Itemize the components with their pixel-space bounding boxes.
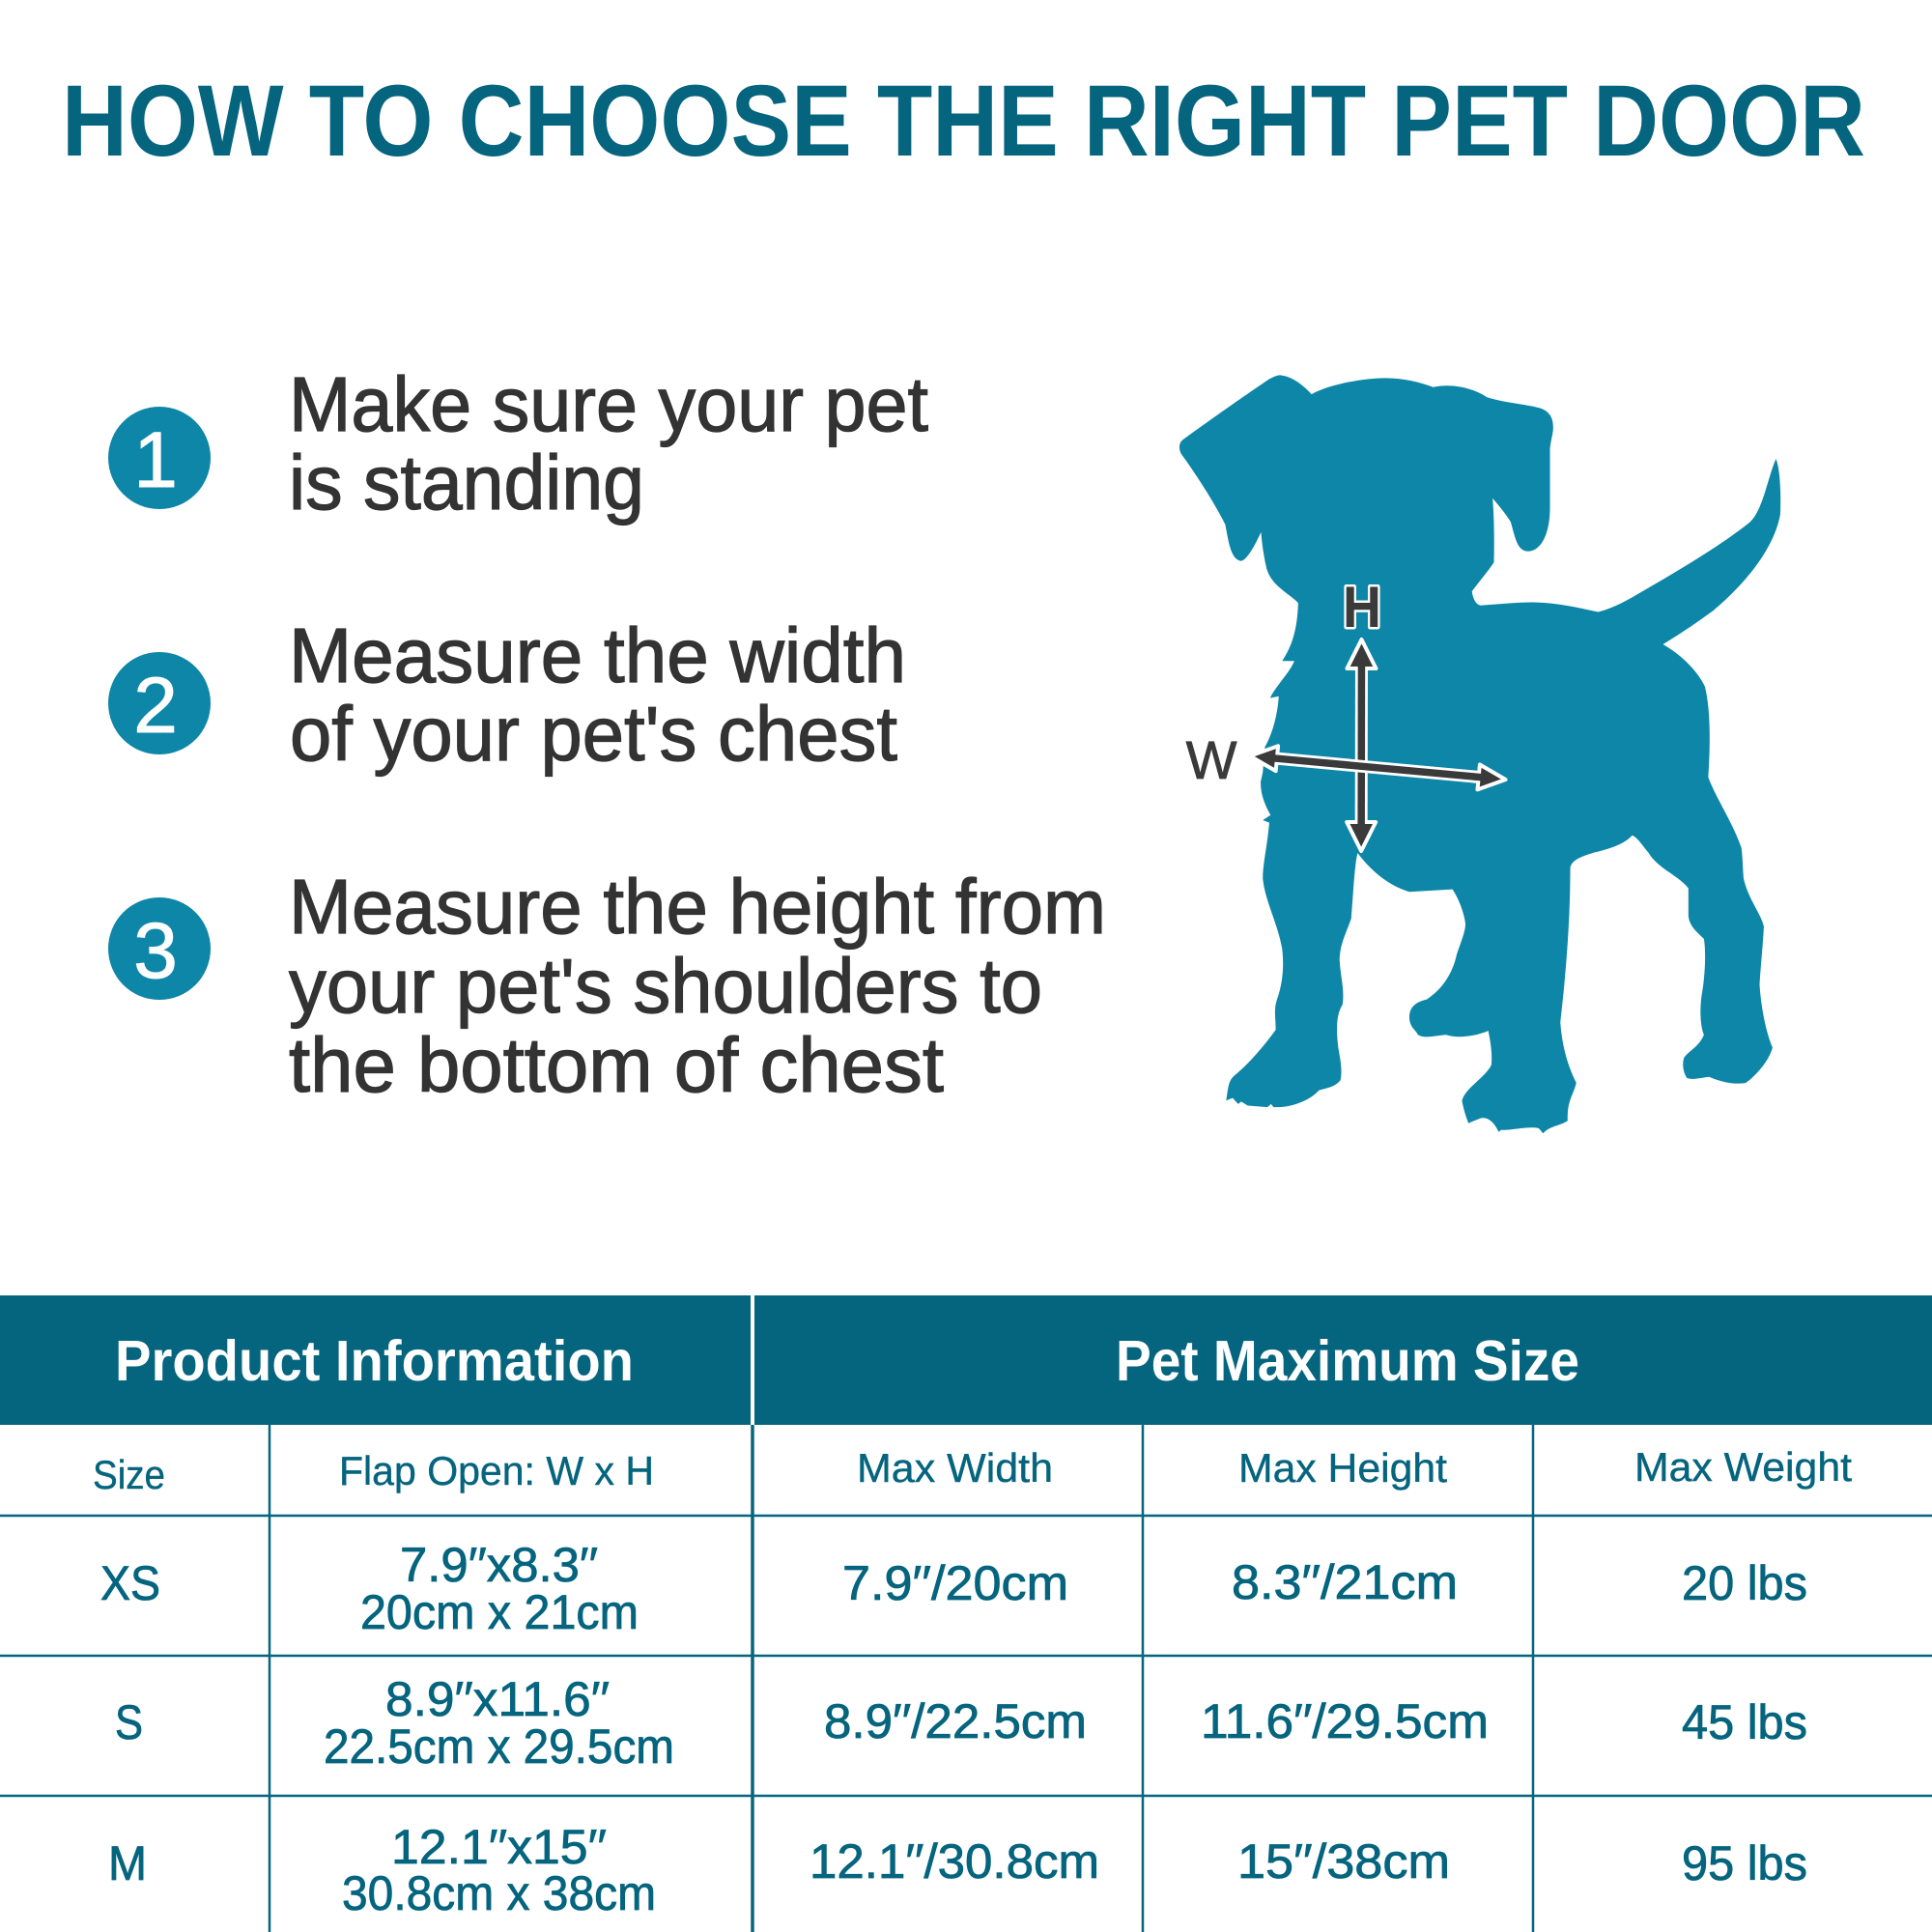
step 3 text: Measure the height from [289,864,1106,950]
icon: dog silhouette [1179,375,1780,1133]
row S: 45 lbs [1682,1695,1807,1749]
step 1 text: Make sure your pet [289,361,928,447]
size table [0,1295,1932,1932]
row S: S [115,1695,143,1749]
row M: M [108,1836,147,1890]
step 3 badge: 3 [133,907,178,995]
column headers: Size [93,1452,165,1497]
row XS: 20 lbs [1682,1556,1807,1610]
row XS: 20cm x 21cm [360,1585,639,1639]
step 2 badge [108,652,211,754]
row S: 8.9′′/22.5cm [824,1694,1087,1748]
table header band [0,1295,1932,1425]
step 1 badge: 1 [133,416,178,504]
header: pet maximum size: Pet Maximum Size [1116,1329,1579,1393]
panel: measuring steps [108,361,1106,1108]
illustration: dog with measurements [1179,375,1780,1133]
row XS: 7.9′′/20cm [842,1556,1068,1610]
arrow: height [1347,639,1376,851]
row XS: 7.9′′x8.3′′ [400,1538,598,1592]
row M: 12.1′′x15′′ [391,1820,607,1874]
column headers [93,1444,1852,1497]
label: W: W [1186,729,1237,790]
arrow: width [1249,744,1507,792]
step 3 text [289,864,1106,1108]
column headers: Max Width [857,1445,1053,1491]
row S: 22.5cm x 29.5cm [324,1719,674,1774]
row S: 8.9′′x11.6′′ [385,1672,610,1726]
row M: 30.8cm x 38cm [342,1866,656,1920]
row M: 95 lbs [1682,1836,1807,1890]
step 3 badge [108,897,211,1000]
row XS [100,1538,1807,1639]
column headers: Max Weight [1634,1444,1852,1490]
row S [115,1672,1807,1774]
column headers: Max Height [1238,1445,1447,1491]
step 1 [108,361,928,526]
row S: 11.6′′/29.5cm [1201,1694,1489,1748]
step 2 [108,612,906,777]
row XS: 8.3′′/21cm [1232,1555,1458,1609]
step 2 badge: 2 [133,662,178,750]
step 2 text [289,612,906,777]
row M [108,1820,1807,1920]
label: H: H [1343,575,1381,639]
row M: 12.1′′/30.8cm [810,1834,1099,1889]
step 1 badge [108,407,211,509]
step 2 text: Measure the width [289,612,906,698]
header: product information: Product Information [115,1329,634,1393]
row M: 15′′/38cm [1237,1834,1450,1889]
step 1 text: is standing [289,440,644,526]
step 3 text: your pet's shoulders to [289,943,1042,1029]
step 3 [108,864,1106,1108]
step 2 text: of your pet's chest [290,691,897,777]
row XS: XS [100,1556,160,1610]
step 1 text [289,361,928,526]
step 3 text: the bottom of chest [289,1022,944,1108]
column headers: Flap Open: W x H [339,1448,654,1493]
